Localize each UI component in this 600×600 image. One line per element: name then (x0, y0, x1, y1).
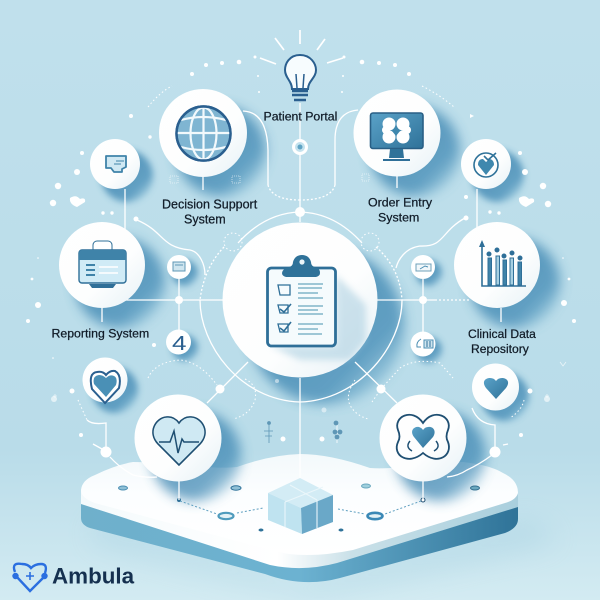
clipboard cast shadow (270, 275, 366, 360)
panel: heartbeat circle (134, 394, 222, 482)
small node: screen icon (167, 255, 191, 279)
panel: clinical data repository (454, 222, 540, 308)
platform body (81, 454, 518, 582)
heading: patient portal: Patient Portal (264, 110, 337, 124)
logo wordmark: Ambula (52, 564, 135, 588)
dotted arcs (78, 86, 524, 420)
panel: centre clipboard (222, 222, 378, 378)
panel: order entry system (354, 90, 440, 176)
icon: lightbulb (260, 30, 343, 100)
panel: reporting system (59, 222, 145, 308)
heading: reporting system: Reporting System (52, 326, 149, 340)
small node: graph icon (411, 255, 435, 279)
logo: Ambula (14, 564, 135, 591)
junction nodes (100, 207, 500, 458)
hub node under lightbulb (292, 139, 308, 155)
panel: clover heart circle (380, 394, 466, 482)
platform ground shadow (90, 520, 560, 598)
icon: heart logo (14, 564, 46, 591)
infographic canvas: Repository (471, 342, 530, 356)
icons: tiny figures near platform (264, 421, 342, 443)
decorative dots (26, 56, 576, 442)
icon: box on platform (268, 478, 333, 534)
platform ovals (118, 484, 480, 532)
icon: globe (176, 106, 230, 160)
panel: decision support system (159, 89, 247, 177)
platform middle layer (81, 490, 518, 568)
heading: decision support system: Decision Support (162, 198, 258, 212)
icon: bar chart (479, 240, 526, 286)
small node: blue heart (472, 364, 519, 410)
connector lines (87, 103, 508, 500)
platform details (118, 484, 480, 532)
icon: heart with pulse (153, 417, 205, 465)
small node: number four (166, 330, 191, 355)
small node: stethoscope and chart icon (410, 332, 436, 356)
panel: patient portal (260, 30, 343, 124)
icon: clipboard (268, 255, 336, 346)
soft circle shadows (75, 106, 560, 501)
infographic canvas: System (184, 212, 226, 226)
icon: printer (79, 241, 126, 288)
icon: monitor (370, 113, 423, 161)
infographic canvas: System (378, 210, 419, 224)
heading: clinical data repository: Clinical Data (468, 327, 536, 341)
small node: layered heart (82, 358, 128, 403)
tiny background sprites (53, 174, 566, 398)
small node: chat icon (90, 139, 140, 189)
small circle shadows (92, 150, 529, 421)
small node: number four: 4 (172, 333, 186, 355)
platform base layer (81, 500, 518, 582)
platform top surface (81, 454, 518, 555)
heading: order entry system: Order Entry (368, 196, 433, 210)
icon: clover outline heart (397, 415, 449, 459)
platform dashed links (180, 501, 421, 514)
small node: heart check icon (461, 139, 511, 189)
